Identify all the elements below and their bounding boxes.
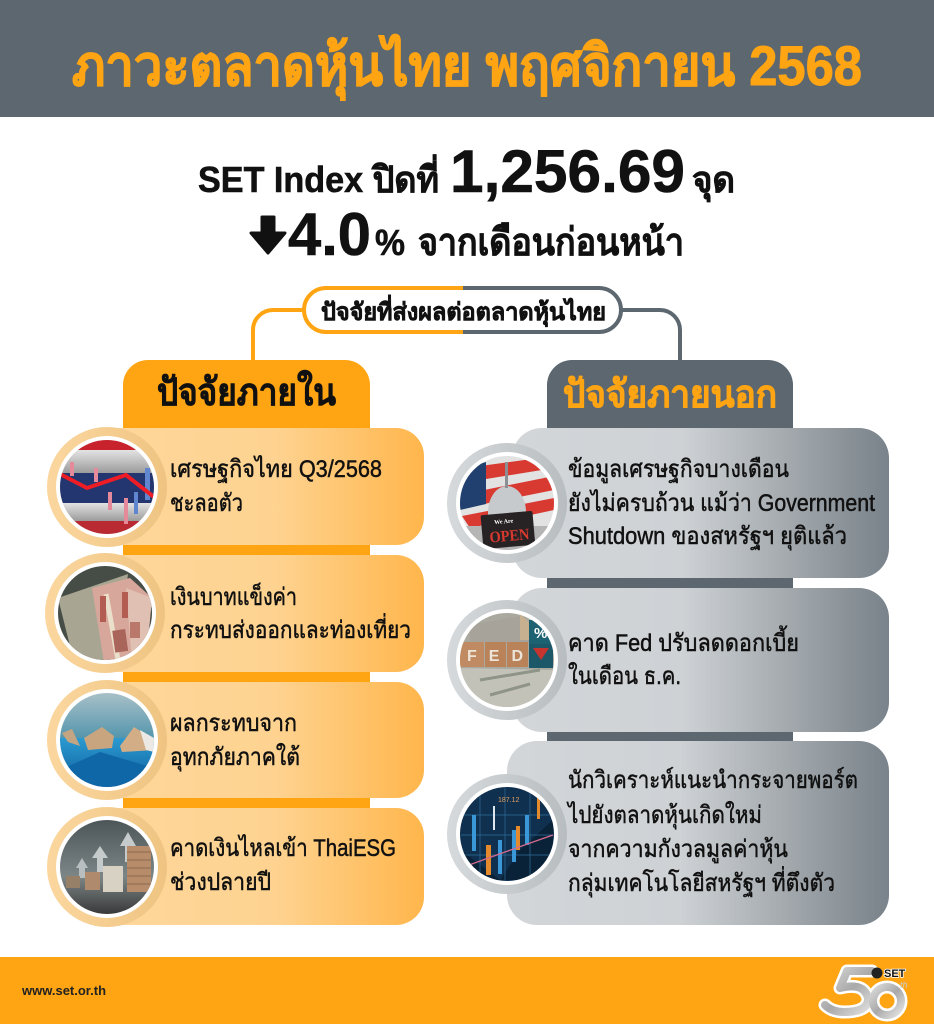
photo: flooded houses	[60, 693, 154, 788]
connector: left	[253, 310, 304, 362]
logo: SET 50th	[825, 968, 908, 1015]
title: ภาวะตลาดหุ้นไทย พฤศจิกายน 2568	[72, 33, 862, 101]
panel spine	[123, 360, 370, 925]
headline: monthly change: %	[375, 222, 405, 263]
card: Fed: ในเดือน ธ.ค.	[568, 662, 681, 690]
card: baht	[45, 553, 424, 673]
card: ThaiESG	[47, 807, 424, 927]
card: Thai economy: ชะลอตัว	[170, 490, 243, 517]
headline: SET Index close: SET Index ปิดที่	[198, 154, 439, 200]
text: คาด Fed ปรับลดดอกเบี้ย	[568, 625, 799, 657]
card: analysts: กลุ่มเทคโนโลยีสหรัฐฯ ที่ตึงตัว	[568, 866, 835, 898]
headline: SET Index close	[198, 138, 735, 205]
card: US data: Shutdown ของสหรัฐฯ ยุติแล้ว	[568, 523, 847, 551]
heading: internal: ปัจจัยภายใน	[157, 370, 336, 414]
card: analysts: จากความกังวลมูลค่าหุ้น	[568, 836, 788, 864]
photo: FED blocks on dollars	[460, 613, 554, 707]
photo: market chart	[460, 787, 554, 881]
photo: FED blocks on dollars: %	[534, 625, 547, 642]
photo: US capitol open sign: OPEN	[489, 526, 531, 547]
card: Thai economy	[47, 427, 424, 547]
card: US data	[447, 428, 889, 578]
panel: internal factors	[45, 360, 424, 927]
card: floods: อุทกภัยภาคใต้	[170, 743, 300, 772]
photo: market chart: 187.12	[498, 797, 520, 804]
website url: www.set.or.th	[21, 983, 106, 998]
logo: SET 50th: th	[900, 980, 908, 990]
heading: external: ปัจจัยภายนอก	[563, 374, 777, 416]
photo: banknotes	[58, 566, 152, 662]
card: analysts	[447, 741, 889, 925]
card: analysts: ไปยังตลาดหุ้นเกิดใหม่	[566, 801, 762, 830]
panel spine	[547, 360, 793, 925]
footer	[0, 957, 934, 1024]
panel: external factors	[447, 360, 889, 925]
connector: right	[621, 310, 680, 362]
photo: FED blocks on dollars: F E D	[467, 648, 523, 665]
card: Fed	[447, 588, 889, 732]
card: US data: ยังไม่ครบถ้วน แม้ว่า Government	[568, 489, 875, 517]
text: เงินบาทแข็งค่า	[170, 582, 297, 611]
photo: coin stacks	[60, 820, 154, 914]
header banner	[0, 0, 934, 117]
headline: monthly change: จากเดือนก่อนหน้า	[418, 222, 684, 264]
headline: SET Index close: จุด	[692, 159, 735, 203]
text: ข้อมูลเศรษฐกิจบางเดือน	[568, 456, 789, 484]
photo: US capitol open sign: We Are	[494, 518, 514, 526]
headline: monthly change: 4.0	[288, 201, 371, 268]
factors pill: ปัจจัยที่ส่งผลต่อตลาดหุ้นไทย	[321, 294, 606, 328]
card: baht: กระทบส่งออกและท่องเที่ยว	[170, 613, 411, 644]
text: คาดเงินไหลเข้า ThaiESG	[170, 834, 396, 862]
text: ผลกระทบจาก	[170, 710, 297, 737]
factors pill	[304, 288, 621, 332]
headline: SET Index close: 1,256.69	[450, 138, 685, 205]
card: floods	[47, 680, 424, 800]
logo: SET 50th: SET	[884, 968, 906, 980]
text: เศรษฐกิจไทย Q3/2568	[170, 455, 382, 483]
headline: monthly change	[251, 201, 684, 268]
text: นักวิเคราะห์แนะนำกระจายพอร์ต	[568, 766, 858, 794]
icon: down arrow	[251, 217, 285, 253]
card: ThaiESG: ช่วงปลายปี	[170, 869, 271, 896]
photo: flag and falling chart	[60, 440, 154, 535]
photo: US capitol open sign	[460, 456, 554, 550]
